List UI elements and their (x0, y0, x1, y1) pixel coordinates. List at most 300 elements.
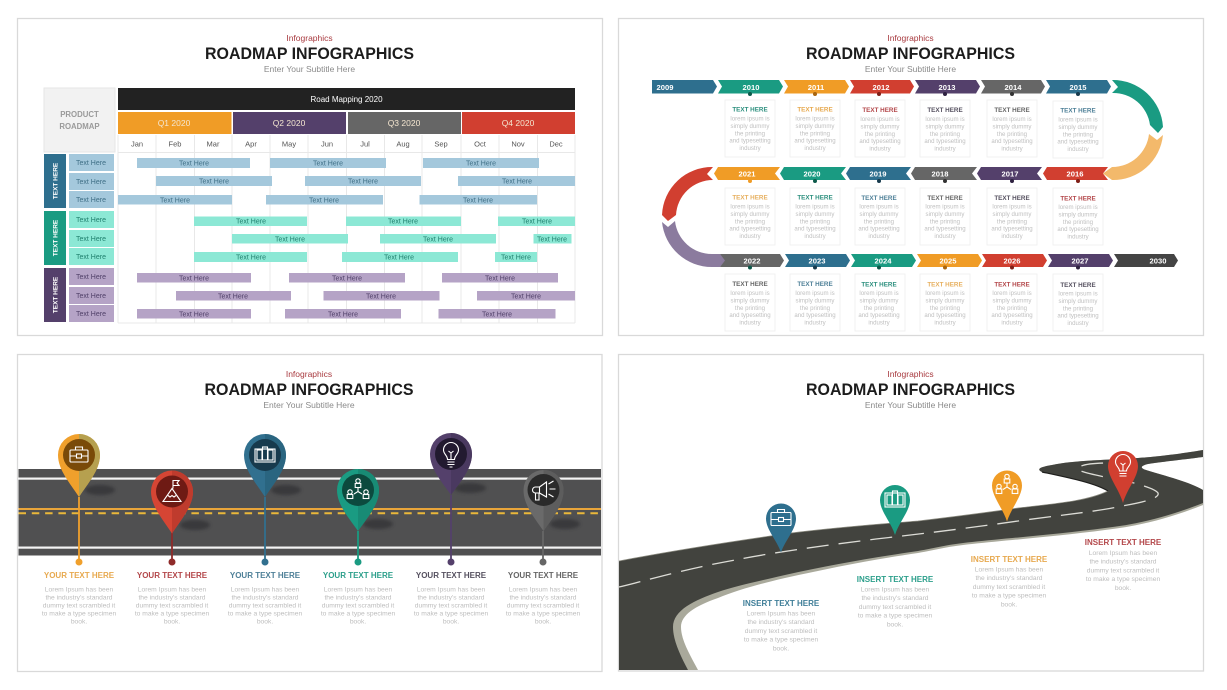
timeline arrows row 1: 2011 (808, 83, 825, 92)
timeline arrows row 3: 2025 (940, 256, 957, 266)
map pin orange (992, 470, 1022, 522)
card 2026 (987, 266, 1037, 331)
teal group: Text Here (236, 254, 266, 262)
teal group: Text Here (76, 254, 106, 261)
text block 5: to make a type specimen (414, 610, 488, 618)
panel: straight road (18, 354, 602, 672)
card 2015: lorem ipsum is (1058, 116, 1098, 124)
quarter headers (118, 112, 575, 134)
timeline arrows row 1: 2015 (1070, 83, 1087, 92)
blue group: TEXT HERE (52, 162, 60, 199)
text block 2: to make a type specimen (135, 610, 209, 618)
card 2022: TEXT HERE (732, 281, 768, 288)
purple group: Text Here (76, 293, 106, 300)
insert text 3: book. (1001, 601, 1017, 608)
title block: straight road: Infographics (286, 369, 332, 379)
card 2024 (855, 266, 905, 331)
month labels: Feb (169, 140, 181, 148)
card 2012: industry (869, 146, 892, 153)
month labels: Oct (474, 140, 487, 148)
insert text 4: to make a type specimen (1086, 576, 1160, 583)
timeline arrows row 1: 2010 (743, 83, 759, 92)
text block 6: to make a type specimen (506, 610, 580, 618)
month labels: Nov (511, 140, 525, 148)
purple group: Text Here (511, 293, 541, 300)
card 2025: lorem ipsum is (925, 290, 965, 297)
card 2018: and typesetting (924, 226, 966, 233)
insert text 1: the industry's standard (747, 619, 815, 626)
card 2019: and typesetting (858, 226, 900, 233)
card 2025: and typesetting (924, 312, 966, 319)
purple group: Text Here (328, 311, 358, 318)
text block 3: dummy text scrambled it (229, 602, 301, 610)
insert text 2: Lorem Ipsum has been (861, 586, 929, 594)
text block 6 (506, 571, 580, 626)
text block 3: the industry's standard (231, 594, 299, 602)
card 2024: simply dummy (860, 297, 899, 304)
purple group: Text Here (482, 311, 512, 318)
quarter headers: Q1 2020 (158, 118, 191, 128)
card 2020: and typesetting (794, 226, 836, 233)
insert text 4: INSERT TEXT HERE (1085, 538, 1162, 547)
insert text 1: INSERT TEXT HERE (743, 599, 820, 608)
card 2013: lorem ipsum is (925, 116, 965, 123)
card 2018: lorem ipsum is (925, 204, 965, 210)
insert text 3: the industry's standard (975, 575, 1043, 582)
card 2023: and typesetting (794, 312, 836, 319)
card 2023 (790, 266, 840, 331)
blue group: Text Here (313, 160, 343, 168)
title block: gantt: Infographics (286, 33, 333, 43)
card 2020: simply dummy (796, 211, 835, 218)
card 2026: and typesetting (991, 312, 1033, 319)
purple group: Text Here (76, 274, 106, 281)
timeline arrows row 2: 2019 (870, 170, 886, 178)
card 2021 (725, 179, 775, 245)
card 2020: industry (804, 233, 827, 240)
pin 2 flag mountain (151, 470, 210, 566)
timeline arrows row 2: 2016 (1067, 170, 1083, 178)
card 2026: industry (1001, 320, 1024, 327)
blue group: Text Here (76, 160, 106, 167)
text block 6: Lorem Ipsum has been (509, 586, 577, 594)
card 2020: TEXT HERE (797, 194, 833, 202)
timeline arrows row 1: 2014 (1005, 83, 1022, 92)
card 2014: the printing (997, 131, 1027, 138)
insert text 3: INSERT TEXT HERE (971, 555, 1048, 564)
title block: straight road: Enter Your Subtitle Here (263, 400, 355, 410)
card 2015 (1053, 92, 1103, 158)
card 2011: and typesetting (794, 138, 836, 145)
quarter headers: Q4 2020 (502, 118, 535, 128)
card 2026: TEXT HERE (994, 282, 1030, 288)
card 2011: industry (804, 145, 827, 152)
text block 4: dummy text scrambled it (322, 602, 394, 610)
insert text 3: dummy text scrambled it (973, 584, 1045, 591)
quarter headers: Q3 2020 (388, 118, 421, 128)
card 2022: the printing (735, 305, 765, 312)
month labels (131, 140, 563, 148)
teal group: Text Here (236, 219, 266, 226)
card 2019: lorem ipsum is (859, 204, 899, 210)
card 2013: the printing (930, 131, 960, 138)
teal group: Text Here (76, 217, 106, 224)
title block: timeline: ROADMAP INFOGRAPHICS (806, 44, 1015, 63)
card 2016: industry (1067, 234, 1090, 241)
card 2018: industry (934, 233, 957, 240)
insert text 4: Lorem Ipsum has been (1089, 550, 1157, 557)
text block 5: the industry's standard (417, 594, 485, 602)
timeline arrows row 2: 2021 (739, 170, 756, 178)
purple group (44, 268, 575, 322)
insert text 3 (971, 555, 1048, 608)
card 2015: simply dummy (1059, 124, 1098, 131)
card 2023: the printing (800, 305, 830, 312)
card 2017: the printing (997, 218, 1027, 225)
blue group: Text Here (199, 178, 229, 186)
text block 5: YOUR TEXT HERE (416, 571, 487, 580)
title block: gantt (205, 33, 414, 74)
text block 1: YOUR TEXT HERE (44, 571, 115, 580)
map pin teal (880, 485, 910, 535)
teal group: Text Here (423, 236, 453, 243)
card 2019: the printing (864, 218, 894, 225)
text block 5: dummy text scrambled it (415, 602, 487, 610)
card 2012: and typesetting (859, 138, 901, 145)
card 2010: TEXT HERE (732, 106, 768, 114)
card 2018: the printing (930, 218, 960, 225)
card 2018: simply dummy (926, 211, 965, 218)
card 2020: lorem ipsum is (795, 204, 835, 210)
text block 1: the industry's standard (45, 594, 113, 602)
title block: straight road (204, 369, 414, 410)
card 2024: TEXT HERE (861, 282, 897, 288)
teal group: Text Here (522, 219, 552, 226)
title block: winding road: Infographics (887, 369, 934, 379)
card 2018: TEXT HERE (927, 195, 963, 202)
month labels: Jul (360, 140, 370, 148)
timeline arrows row 2: 2017 (1002, 170, 1018, 178)
timeline arrows row 1: 2012 (873, 83, 889, 92)
text block 4: book. (350, 618, 366, 626)
card 2014: industry (1001, 146, 1024, 153)
card 2010: and typesetting (729, 138, 771, 145)
text block 6: YOUR TEXT HERE (508, 571, 579, 580)
timeline arrows row 2: 2018 (932, 170, 948, 178)
card 2024: lorem ipsum is (859, 290, 899, 297)
curved connector left (662, 167, 726, 267)
card 2015: and typesetting (1057, 139, 1099, 146)
card 2017: lorem ipsum is (992, 204, 1032, 210)
product roadmap header (44, 88, 115, 152)
blue group: Text Here (76, 179, 106, 186)
pin 4 people network (337, 469, 393, 566)
card 2013 (920, 92, 970, 157)
card 2019: industry (868, 233, 891, 240)
panel: winding road (618, 354, 1204, 671)
card 2026: simply dummy (993, 297, 1032, 304)
card 2016: and typesetting (1057, 226, 1099, 233)
text block 4: YOUR TEXT HERE (323, 571, 394, 580)
text block 1: dummy text scrambled it (43, 602, 115, 610)
card 2023: industry (804, 320, 827, 327)
text block 3: to make a type specimen (228, 610, 302, 618)
text block 3: Lorem Ipsum has been (231, 586, 299, 594)
card 2025: simply dummy (926, 297, 965, 304)
timeline arrows row 3: 2024 (875, 256, 892, 266)
card 2017 (987, 179, 1037, 245)
winding road illustration (619, 450, 1203, 670)
card 2025: TEXT HERE (927, 282, 963, 288)
title block: winding road: ROADMAP INFOGRAPHICS (806, 380, 1015, 399)
card 2014: simply dummy (993, 123, 1032, 130)
month labels: Dec (549, 140, 563, 148)
card 2017: industry (1001, 233, 1024, 240)
text block 5: book. (443, 618, 459, 626)
purple group: TEXT HERE (52, 276, 60, 313)
card 2025: the printing (930, 305, 960, 312)
card 2022: and typesetting (729, 312, 771, 319)
text block 6: the industry's standard (509, 594, 577, 602)
curved connector right (1103, 80, 1163, 180)
text block 4 (321, 571, 395, 626)
text block 5: Lorem Ipsum has been (417, 586, 485, 594)
card 2012: lorem ipsum is (860, 116, 900, 123)
purple group: Text Here (366, 293, 396, 300)
timeline arrows row 2: 2020 (804, 170, 820, 178)
map pin blue (766, 504, 796, 552)
teal group: Text Here (275, 236, 305, 243)
card 2027: lorem ipsum is (1058, 290, 1098, 298)
card 2010: the printing (735, 130, 765, 137)
card 2017: simply dummy (993, 211, 1032, 218)
teal group: Text Here (501, 254, 531, 262)
month labels: Jun (321, 140, 333, 148)
text block 6: book. (535, 618, 551, 626)
card 2010: industry (739, 145, 762, 152)
card 2014: and typesetting (991, 138, 1033, 145)
purple group: Text Here (179, 275, 209, 282)
insert text 2: the industry's standard (861, 595, 929, 602)
teal group: Text Here (388, 219, 418, 226)
title block: timeline: Enter Your Subtitle Here (865, 64, 956, 74)
card 2027: and typesetting (1057, 313, 1099, 320)
title block: winding road: Enter Your Subtitle Here (865, 400, 956, 410)
timeline arrows row 3: 2030 (1150, 256, 1166, 266)
insert text 1: Lorem Ipsum has been (747, 610, 815, 618)
text block 2: Lorem Ipsum has been (138, 586, 206, 594)
text block 4: the industry's standard (324, 594, 392, 602)
card 2013: TEXT HERE (927, 107, 963, 114)
insert text 4 (1085, 538, 1162, 592)
month labels: Mar (207, 140, 220, 148)
text block 4: Lorem Ipsum has been (324, 586, 392, 594)
card 2011: simply dummy (796, 123, 835, 130)
card 2014: lorem ipsum is (992, 116, 1032, 123)
card 2016: lorem ipsum is (1058, 204, 1098, 211)
insert text 2: dummy text scrambled it (859, 604, 931, 611)
pin 1 briefcase (58, 434, 115, 566)
text block 2: dummy text scrambled it (136, 602, 208, 610)
card 2022: lorem ipsum is (730, 290, 770, 297)
timeline arrows row 1: 2013 (939, 83, 955, 92)
road illustration (18, 469, 601, 556)
road mapping header bar (118, 88, 575, 110)
card 2024: the printing (864, 305, 894, 312)
insert text 4: book. (1115, 585, 1131, 592)
quarter headers: Q2 2020 (273, 118, 306, 128)
card 2019: simply dummy (860, 211, 899, 218)
card 2015: TEXT HERE (1060, 108, 1096, 114)
card 2012: TEXT HERE (862, 107, 898, 114)
blue group: Text Here (160, 197, 190, 204)
blue group (44, 154, 575, 208)
text block 3 (228, 571, 302, 626)
panel: gantt roadmap (18, 18, 602, 336)
timeline arrows row 2 (714, 167, 1108, 180)
insert text 3: Lorem Ipsum has been (975, 566, 1043, 574)
teal group: Text Here (76, 236, 106, 243)
card 2019 (855, 179, 905, 245)
insert text 2: book. (887, 621, 903, 628)
purple group: Text Here (485, 275, 515, 282)
card 2020 (790, 179, 840, 245)
timeline arrows row 1: 2009 (657, 83, 673, 92)
month labels: Jan (131, 140, 143, 148)
card 2012 (855, 92, 905, 157)
card 2027: simply dummy (1059, 298, 1098, 305)
card 2022: industry (739, 320, 762, 327)
teal group: Text Here (384, 254, 414, 262)
teal group: TEXT HERE (52, 219, 60, 256)
blue group: Text Here (309, 197, 339, 204)
insert text 1: book. (773, 645, 789, 652)
text block 5 (414, 571, 488, 626)
text block 1: Lorem Ipsum has been (45, 586, 113, 594)
pin 3 buildings (244, 434, 301, 566)
purple group: Text Here (218, 293, 248, 300)
pin 6 megaphone (524, 470, 580, 566)
card 2015: industry (1067, 146, 1090, 153)
card 2027: industry (1067, 320, 1090, 327)
card 2012: simply dummy (861, 123, 900, 130)
purple group: Text Here (76, 311, 106, 318)
card 2011: the printing (800, 130, 830, 137)
card 2010: simply dummy (731, 123, 770, 130)
text block 4: to make a type specimen (321, 610, 395, 618)
card 2010 (725, 92, 775, 157)
card 2025: industry (934, 320, 957, 327)
blue group: Text Here (348, 178, 378, 186)
card 2012: the printing (865, 131, 895, 138)
timeline arrows row 3 (720, 254, 1178, 267)
card 2014: TEXT HERE (994, 107, 1030, 114)
text block 2: the industry's standard (138, 594, 206, 602)
card 2021: industry (739, 233, 762, 240)
title block: straight road: ROADMAP INFOGRAPHICS (204, 380, 414, 399)
card 2023: TEXT HERE (797, 281, 833, 288)
card 2010: lorem ipsum is (730, 116, 770, 122)
map pin red (1108, 451, 1138, 503)
timeline arrows row 3: 2027 (1072, 256, 1088, 266)
blue group: Text Here (502, 178, 532, 186)
card 2014 (987, 92, 1037, 157)
panel: serpentine timeline (618, 18, 1204, 336)
card 2016: simply dummy (1059, 211, 1098, 218)
card 2016 (1053, 179, 1103, 245)
teal group (44, 211, 575, 265)
timeline arrows row 3: 2023 (809, 256, 825, 266)
card 2021: simply dummy (731, 211, 770, 218)
insert text 2: INSERT TEXT HERE (857, 575, 934, 584)
blue group: Text Here (76, 197, 106, 204)
text block 2: YOUR TEXT HERE (137, 571, 208, 580)
timeline arrows row 3: 2022 (744, 256, 760, 266)
title block: timeline (806, 33, 1015, 74)
card 2021: lorem ipsum is (730, 204, 770, 210)
blue group: Text Here (179, 160, 209, 168)
purple group: Text Here (332, 275, 362, 282)
card 2020: the printing (800, 218, 830, 225)
card 2011: TEXT HERE (797, 106, 833, 114)
card 2027 (1053, 266, 1103, 331)
card 2026: lorem ipsum is (992, 290, 1032, 297)
card 2019: TEXT HERE (861, 195, 897, 202)
road mapping header bar: Road Mapping 2020 (310, 95, 383, 104)
text block 1: book. (71, 618, 87, 626)
insert text 2: to make a type specimen (858, 613, 932, 620)
insert text 1: dummy text scrambled it (745, 628, 817, 635)
card 2024: and typesetting (858, 312, 900, 319)
title block: gantt: ROADMAP INFOGRAPHICS (205, 44, 414, 63)
card 2027: the printing (1063, 305, 1093, 312)
card 2013: and typesetting (924, 138, 966, 145)
text block 6: dummy text scrambled it (507, 602, 579, 610)
teal group: Text Here (537, 236, 567, 243)
text block 3: YOUR TEXT HERE (230, 571, 301, 580)
card 2021: the printing (735, 218, 765, 225)
insert text 3: to make a type specimen (972, 593, 1046, 600)
blue group: Text Here (463, 197, 493, 204)
card 2016: the printing (1063, 219, 1093, 226)
insert text 1: to make a type specimen (744, 637, 818, 644)
card 2021: and typesetting (729, 226, 771, 233)
purple group: Text Here (179, 311, 209, 318)
text block 1: to make a type specimen (42, 610, 116, 618)
card 2024: industry (868, 320, 891, 327)
insert text 4: the industry's standard (1089, 559, 1157, 566)
card 2011 (790, 92, 840, 157)
month labels: May (282, 140, 296, 148)
card 2017: and typesetting (991, 226, 1033, 233)
product roadmap header: ROADMAP (59, 122, 100, 131)
card 2026: the printing (997, 305, 1027, 312)
card 2015: the printing (1063, 131, 1093, 138)
card 2025 (920, 266, 970, 331)
card 2027: TEXT HERE (1060, 282, 1096, 289)
month labels: Sep (434, 140, 448, 148)
text block 1 (42, 571, 116, 626)
blue group: Text Here (466, 160, 496, 168)
insert text 2 (857, 575, 934, 628)
text block 2: book. (164, 618, 180, 626)
card 2018 (920, 179, 970, 245)
card 2016: TEXT HERE (1060, 196, 1096, 202)
text block 3: book. (257, 618, 273, 626)
card 2023: simply dummy (796, 297, 835, 304)
timeline arrows row 3: 2026 (1004, 256, 1020, 266)
month labels: Aug (396, 140, 410, 148)
